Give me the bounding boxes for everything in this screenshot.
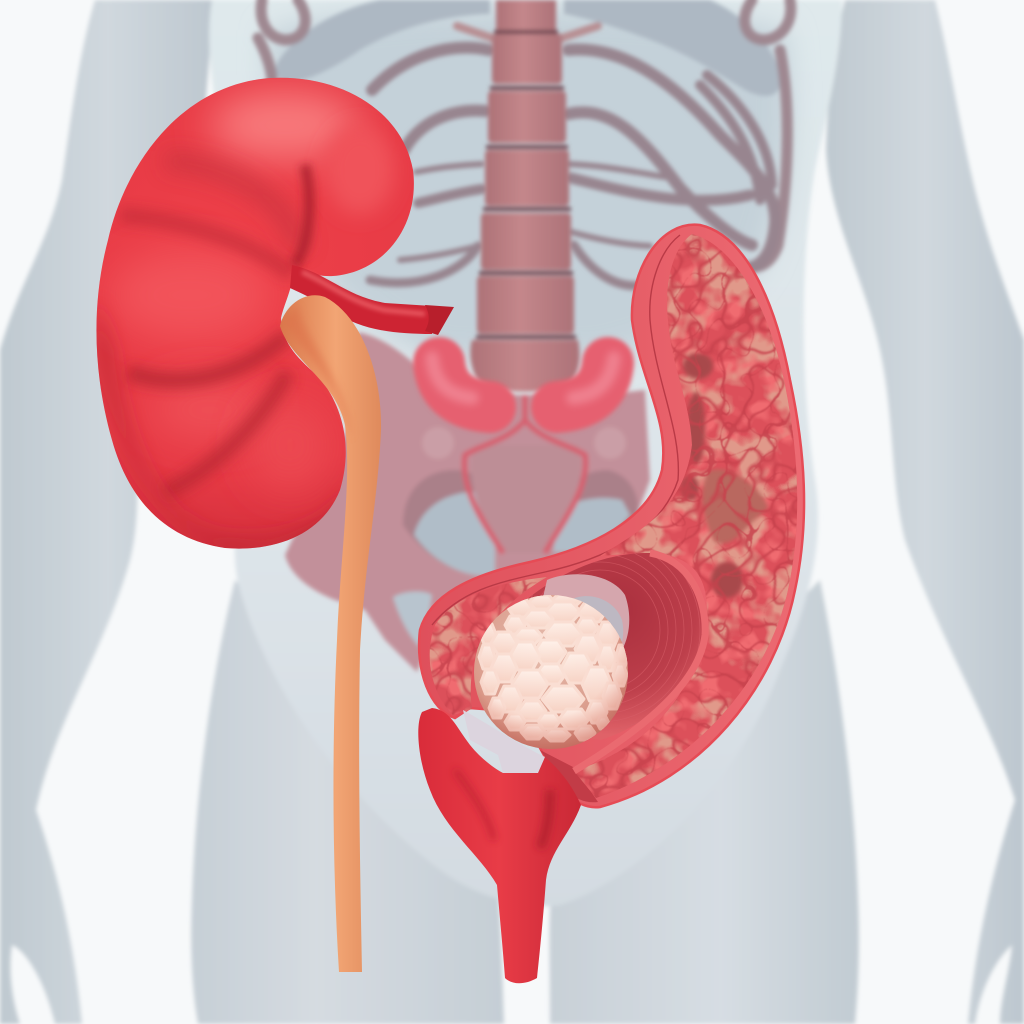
left hip opening interior — [414, 492, 495, 576]
rib cage — [258, 0, 791, 286]
cavity rim — [574, 553, 705, 771]
kidney highlights — [210, 90, 360, 160]
upper right organ — [564, 0, 781, 96]
ureter top shading — [283, 305, 352, 440]
tissue cavities — [681, 353, 743, 598]
lower pelvic gap — [393, 591, 432, 650]
urethra — [418, 708, 581, 983]
pelvis — [285, 332, 650, 672]
far opening centre — [560, 596, 623, 650]
wall seam — [432, 235, 680, 625]
left hip opening — [403, 470, 495, 576]
renal vessel — [290, 265, 432, 334]
urethra left fold — [455, 770, 494, 840]
outer rib loops — [258, 0, 791, 268]
spine — [470, 0, 580, 392]
kidney lobe creases — [165, 160, 300, 250]
right knob — [594, 427, 626, 459]
central pelvic plate — [472, 445, 581, 553]
tissue — [430, 234, 798, 798]
left ribs — [370, 48, 489, 283]
torso — [209, 0, 842, 906]
left leg — [191, 580, 504, 1024]
vessel highlight — [302, 272, 425, 314]
cavity rings — [531, 554, 700, 712]
ureter — [280, 295, 381, 972]
left knob — [422, 427, 454, 459]
kidney — [95, 78, 454, 972]
pelvic vessels — [464, 395, 586, 553]
stone shading — [474, 595, 628, 749]
right ribs — [568, 50, 775, 286]
urethra body — [418, 708, 581, 983]
small paired organs — [432, 358, 614, 407]
left arm — [0, 0, 215, 1024]
right hip opening — [553, 470, 638, 553]
right hip opening interior — [553, 498, 630, 553]
bladder outer wall — [419, 225, 804, 807]
urethra right fold — [540, 790, 550, 848]
bladder cross-section — [400, 220, 820, 820]
kidney outer shadow — [96, 316, 330, 549]
upper left organ — [276, 0, 490, 82]
rib cage interior — [269, 8, 790, 360]
vessel opening — [425, 305, 454, 335]
right leg — [550, 580, 859, 1024]
transverse processes — [457, 26, 598, 38]
far opening — [540, 574, 629, 650]
pale gap — [463, 710, 545, 773]
right arm — [826, 0, 1024, 1024]
lower wall shadow — [540, 750, 598, 802]
central tissue pit — [702, 469, 768, 544]
kidney stone — [474, 593, 628, 749]
bladder cavity — [500, 553, 705, 740]
